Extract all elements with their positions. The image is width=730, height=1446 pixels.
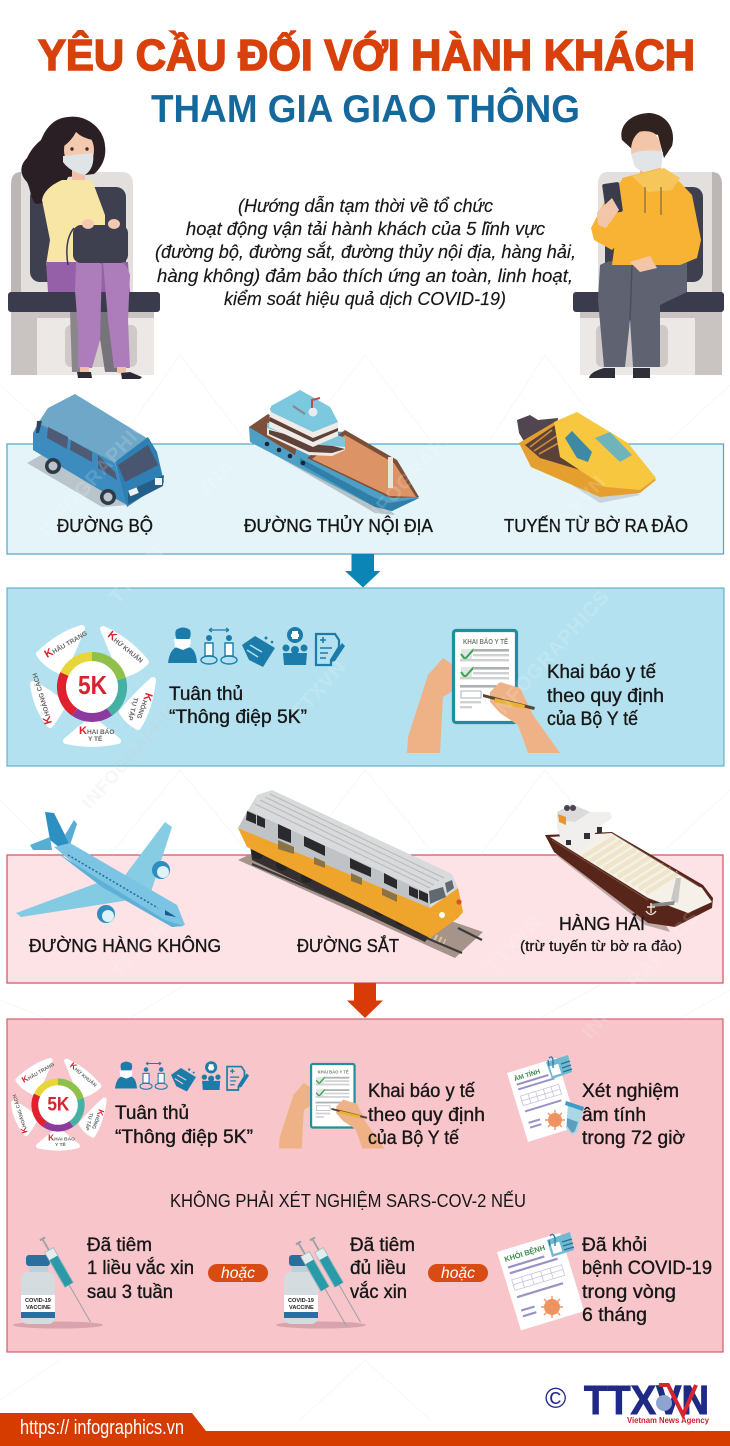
subheading: no test needed if: KHÔNG PHẢI XÉT NGHIỆM SARS-COV-2 NẾU <box>170 1190 526 1211</box>
description text <box>155 196 576 309</box>
icon: medical declaration clipboard small <box>279 1064 385 1149</box>
text: one dose after 3 weeks: sau 3 tuần <box>87 1282 173 1303</box>
5K diagram: KHÔNG <box>134 691 154 721</box>
text: recovered within 6 months: 6 tháng <box>582 1305 647 1326</box>
description text: hàng không) đảm bảo thích ứng an toàn, linh hoạt, <box>157 266 573 286</box>
icon: medical declaration clipboard: KHAI BÁO Y TẾ <box>463 636 508 646</box>
title <box>38 29 695 131</box>
watermarks: INFOGRAPHICS <box>35 404 162 541</box>
panel labels: road, waterway, island <box>57 515 688 536</box>
icon: medical declaration clipboard <box>407 630 560 753</box>
watermarks: TTXVN <box>105 541 169 608</box>
title: THAM GIA GIAO THÔNG <box>151 86 580 131</box>
logo: TTXVN Vietnam News Agency: © <box>545 1383 566 1415</box>
text: negative test within 72 hours: trong 72 giờ <box>582 1128 685 1149</box>
5K diagram small: KHAI BÁO <box>48 1133 75 1143</box>
description text: kiểm soát hiệu quả dịch COVID-19) <box>224 289 506 309</box>
logo: TTXVN Vietnam News Agency: TTXVN <box>584 1377 709 1423</box>
arrow: red down <box>347 983 383 1018</box>
icon: vaccine vial with two syringes: COVID-19 <box>288 1298 314 1304</box>
icon: vaccine vial with one syringe: COVID-19 <box>25 1298 51 1304</box>
illustration: woman seated with mask <box>8 117 160 379</box>
panel labels: road, waterway, island: ĐƯỜNG BỘ <box>57 515 153 536</box>
panel: requirements for air, rail, sea <box>7 1019 723 1352</box>
description text: (Hướng dẫn tạm thời về tổ chức <box>238 196 493 216</box>
watermarks: INFOGRAPHICS <box>357 396 484 533</box>
arrow: blue down <box>345 554 380 588</box>
icons: 5K row <box>168 627 345 667</box>
text: medical declaration <box>547 662 664 730</box>
text: medical declaration: Khai báo y tế <box>368 1081 475 1102</box>
description text: (đường bộ, đường sắt, đường thủy nội địa, hàng hải, <box>155 242 576 262</box>
icon: cargo ship <box>545 804 713 932</box>
text: recovered within 6 months: trong vòng <box>582 1282 676 1303</box>
panel: aviation, rail, maritime <box>7 855 723 983</box>
5K diagram: KHOẢNG CÁCH <box>28 671 55 726</box>
text: fully vaccinated <box>350 1235 415 1303</box>
background triangle pattern <box>0 355 730 1420</box>
text: recovered within 6 months: bệnh COVID-19 <box>582 1258 712 1279</box>
badge: or: hoặc <box>221 1265 255 1282</box>
5K diagram: KHỬ KHUẨN <box>105 629 147 666</box>
text: one dose after 3 weeks <box>87 1235 194 1303</box>
icons: 5K row small <box>115 1061 249 1092</box>
panel: requirements for road and water <box>7 588 724 766</box>
watermarks <box>35 396 704 1043</box>
text: observe 5K message <box>115 1103 253 1148</box>
title: YÊU CẦU ĐỐI VỚI HÀNH KHÁCH <box>38 29 695 80</box>
text: observe 5K message: Tuân thủ <box>115 1103 189 1124</box>
5K diagram small <box>8 1058 107 1148</box>
5K diagram small: Y TẾ <box>55 1141 67 1148</box>
icon: blue van <box>27 394 164 507</box>
description text: hoạt động vận tải hành khách của 5 lĩnh vực <box>186 219 545 239</box>
icon: vaccine vial with two syringes: VACCINE <box>289 1305 314 1311</box>
panel labels: air, rail, sea: HÀNG HẢI <box>559 913 645 934</box>
icon: recovered document <box>497 1232 584 1330</box>
panel labels: air, rail, sea: ĐƯỜNG HÀNG KHÔNG <box>29 935 221 956</box>
illustration: man seated with mask and phone <box>573 113 724 378</box>
watermarks: TTXVN <box>547 471 611 538</box>
watermarks: TTXVN <box>482 911 546 978</box>
watermarks: INFOGRAPHICS <box>78 688 193 813</box>
watermarks: VNA <box>192 455 239 503</box>
panel labels: air, rail, sea: ĐƯỜNG SẮT <box>297 935 399 956</box>
text: medical declaration: của Bộ Y tế <box>368 1128 459 1149</box>
text: observe 5K message: “Thông điệp 5K” <box>169 707 307 728</box>
5K diagram <box>28 627 154 744</box>
panel: road, inland waterway, island routes <box>7 444 724 554</box>
logo: TTXVN Vietnam News Agency: Vietnam News Agency <box>627 1415 709 1425</box>
icon: vaccine vial with two syringes <box>276 1236 366 1329</box>
5K diagram: TỤ TẬP <box>126 696 141 722</box>
5K diagram: Y TẾ <box>88 733 103 743</box>
icon: negative test document: ÂM TÍNH <box>513 1066 541 1083</box>
text: fully vaccinated: vắc xin <box>350 1281 407 1303</box>
text: fully vaccinated: Đã tiêm <box>350 1235 415 1256</box>
text: observe 5K message: Tuân thủ <box>169 684 243 705</box>
5K diagram small: 5K <box>47 1093 70 1115</box>
5K diagram: 5K <box>78 670 107 700</box>
5K diagram small: KHỬ KHUẨN <box>68 1060 100 1089</box>
text: recovered within 6 months: Đã khỏi <box>582 1235 647 1256</box>
5K diagram small: TỤ TẬP <box>83 1112 95 1132</box>
text: medical declaration: theo quy định <box>547 686 664 707</box>
text: negative test within 72 hours: âm tính <box>582 1105 646 1126</box>
5K diagram small: KHẨU TRANG <box>20 1058 56 1085</box>
icon: airplane <box>16 812 185 927</box>
icon: inland ferry boat <box>249 390 419 515</box>
text: medical declaration: Khai báo y tế <box>547 662 656 683</box>
icon: vaccine vial with one syringe <box>13 1236 103 1328</box>
badge: or <box>428 1264 488 1282</box>
text: negative test within 72 hours: Xét nghiệm <box>582 1081 679 1102</box>
text: fully vaccinated: đủ liều <box>350 1258 406 1279</box>
text: medical declaration: của Bộ Y tế <box>547 709 638 730</box>
panel labels: air, rail, sea: (trừ tuyến từ bờ ra đảo) <box>520 939 682 955</box>
watermarks: INFOGRAPHICS <box>487 586 614 723</box>
badge: or: hoặc <box>441 1265 475 1282</box>
text: medical declaration <box>368 1081 485 1149</box>
watermarks: INFOGRAPHICS <box>577 906 704 1043</box>
panel labels: road, waterway, island: TUYẾN TỪ BỜ RA ĐẢO <box>504 515 688 536</box>
text: one dose after 3 weeks: Đã tiêm <box>87 1235 152 1256</box>
5K diagram small: KHOẢNG CÁCH <box>8 1093 30 1135</box>
footer band with url <box>0 1413 730 1446</box>
logo: TTXVN Vietnam News Agency <box>545 1377 709 1425</box>
text: observe 5K message: “Thông điệp 5K” <box>115 1127 253 1148</box>
watermarks: TTXVN <box>287 656 351 723</box>
text: negative test within 72 hours <box>582 1081 685 1149</box>
text: recovered within 6 months <box>582 1235 712 1326</box>
panel labels: road, waterway, island: ĐƯỜNG THỦY NỘI ĐỊA <box>244 515 433 536</box>
text: observe 5K message <box>169 684 307 728</box>
text: medical declaration: theo quy định <box>368 1105 485 1126</box>
watermarks: TTXVN <box>107 916 171 983</box>
icon: negative test document <box>507 1055 584 1142</box>
panel labels: air, rail, sea <box>29 913 682 956</box>
icon: recovered document: KHỎI BỆNH <box>503 1243 546 1264</box>
5K diagram small: KHÔNG <box>90 1108 107 1131</box>
badge: or <box>208 1264 268 1282</box>
icon: locomotive on rails <box>238 790 483 958</box>
footer band with url: https:// infographics.vn <box>20 1417 184 1439</box>
icon: speedboat <box>517 412 656 503</box>
text: one dose after 3 weeks: 1 liều vắc xin <box>87 1257 194 1279</box>
5K diagram: KHẨU TRANG <box>42 627 89 661</box>
5K diagram: KHAI BÁO <box>79 725 114 737</box>
icon: medical declaration clipboard small: KHAI BÁO Y TẾ <box>318 1068 349 1075</box>
icon: vaccine vial with one syringe: VACCINE <box>26 1305 51 1311</box>
